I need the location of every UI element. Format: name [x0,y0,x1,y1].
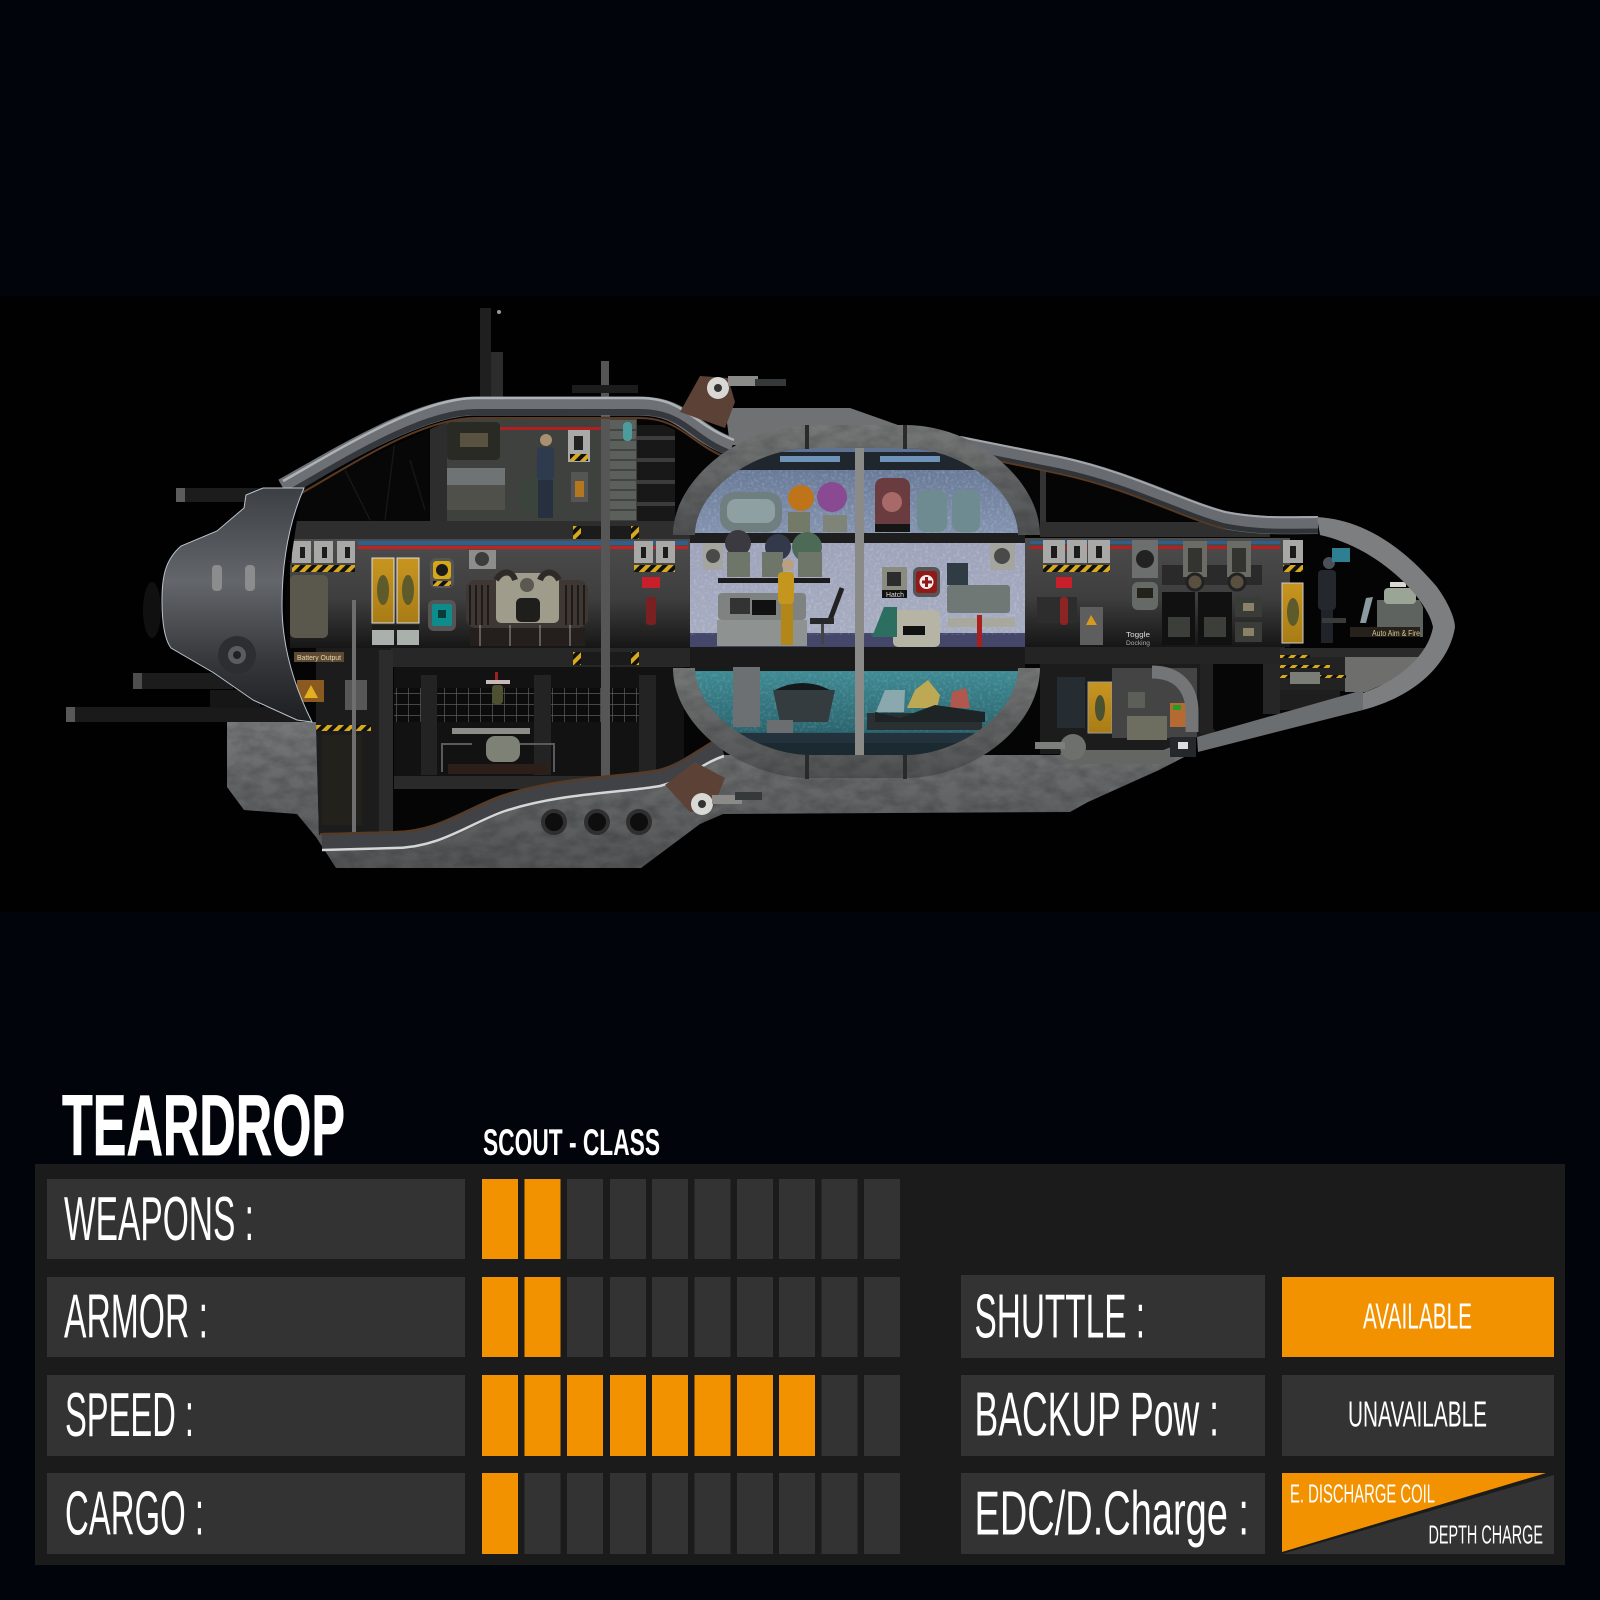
row: edc / depth charge [961,1473,1554,1554]
cap details [212,565,256,674]
airlock arc [1152,672,1192,732]
hull interior base [285,414,1433,835]
top plants [788,482,847,532]
hanging plants shelf [718,530,830,583]
mine cart [733,667,835,733]
row: shuttle: AVAILABLE [1363,1296,1472,1337]
row: cargo [47,1473,900,1554]
central sphere rooms [690,447,1025,755]
left shaft [297,600,393,835]
battery output label: Battery Output [297,653,342,662]
central ring bottom [673,668,1040,778]
sphere ceiling track [690,452,1025,470]
lab desk [717,593,807,646]
sphere middle room [690,543,1025,633]
infographic canvas [35,308,1565,1565]
bow ring [1317,517,1455,710]
upper deck beam [290,521,690,539]
central ring top [673,425,1040,535]
sphere ladder pole [855,447,864,755]
row: backup power: UNAVAILABLE [1348,1394,1487,1435]
hull pipe ports [543,811,650,833]
class subtitle: SCOUT - CLASS [483,1122,660,1163]
panel and extinguisher [1037,597,1103,645]
toggle docking label: Toggle [1126,630,1150,639]
toggle docking label: Docking [1126,640,1150,647]
right lower compartments [1040,664,1280,754]
upper machine room [447,418,637,521]
pilot [1318,548,1350,643]
top hull band right [960,437,1318,531]
reactor [466,572,588,646]
engines [1162,541,1262,590]
right specimen tanks [875,478,980,532]
bow room [1305,533,1435,648]
sphere middle floor band [690,633,1025,647]
rear antenna rods [66,488,311,722]
mid deck left wall [290,539,690,648]
person in upper room [537,434,554,518]
fan [469,550,496,569]
lower deck machinery [442,728,554,774]
right mid deck [1025,522,1290,647]
bubble dome [720,492,782,532]
bottom turret [665,762,762,815]
upper right shelves [637,425,675,521]
ladder hatch hazards [573,526,639,665]
wallpaper speckle [690,470,1025,635]
row: weapons: WEAPONS : [64,1185,254,1254]
left machine [290,575,328,638]
hatch panel [882,567,907,599]
sphere upper room [690,448,1025,535]
hatch panel: Hatch [886,592,904,599]
ring mottling [670,420,1045,782]
top turret [680,376,786,428]
sphere decks [690,533,1025,755]
stats panel [35,1164,1565,1565]
medical equipment [872,563,1015,647]
bottom hull band left [320,740,724,850]
medical sign [913,567,940,597]
helm console: Auto Aim & Fire [1372,629,1420,638]
top hull band left [283,398,734,495]
submarine cross-section [66,308,1455,871]
row: shuttle [961,1275,1554,1358]
title: TEARDROP [62,1078,345,1174]
crystals table [867,680,985,730]
interior compartments [290,400,1435,835]
right switch boxes [1043,540,1110,588]
right deck beam [1025,647,1285,664]
right upper tank lines [1040,470,1046,522]
row: edc / depth charge: EDC/D.Charge : [974,1480,1249,1548]
toggle docking label [1126,632,1150,646]
mid deck beam [379,648,694,667]
helm console [1350,582,1423,638]
hull mottling [220,715,1200,871]
lower deck [394,667,684,776]
row: backup power: BACKUP Pow : [974,1380,1219,1450]
rear nose cap [162,488,312,722]
row: armor: ARMOR : [64,1282,208,1352]
outer grey lower hull [227,722,1194,868]
main ladder [601,416,610,776]
ring joints [805,425,907,779]
bow lower decks [1260,648,1435,710]
fire sign and extinguisher [642,577,660,625]
row: speed: SPEED : [65,1381,194,1450]
bow switch and locker [1282,540,1303,643]
row: shuttle: SHUTTLE : [974,1282,1145,1352]
storage bays [1162,592,1262,645]
row: weapons [47,1179,900,1259]
radiation sign [430,558,454,588]
gold lockers [372,558,419,645]
lower beam [394,776,598,789]
upper left empty tank [344,422,447,521]
switch boxes [292,541,675,572]
upper grey hull bump [725,408,900,445]
bottom hull band right [1197,690,1363,752]
teal terminal [428,600,456,631]
docking pipes [1035,734,1196,764]
chair [810,588,842,644]
row: backup power [961,1375,1554,1456]
wall fans [703,543,1015,570]
picture band background [0,296,1600,912]
row: edc / depth charge: E. DISCHARGE COIL [1290,1478,1435,1508]
radio masts [480,308,638,406]
pipes [358,541,688,549]
person in yellow suit [778,559,794,645]
sphere lower room [690,670,1025,755]
row: speed [47,1375,900,1456]
teal speckle [690,672,1025,732]
dial and tank [1132,540,1158,610]
row: armor [47,1277,900,1357]
row: cargo: CARGO : [65,1480,204,1548]
